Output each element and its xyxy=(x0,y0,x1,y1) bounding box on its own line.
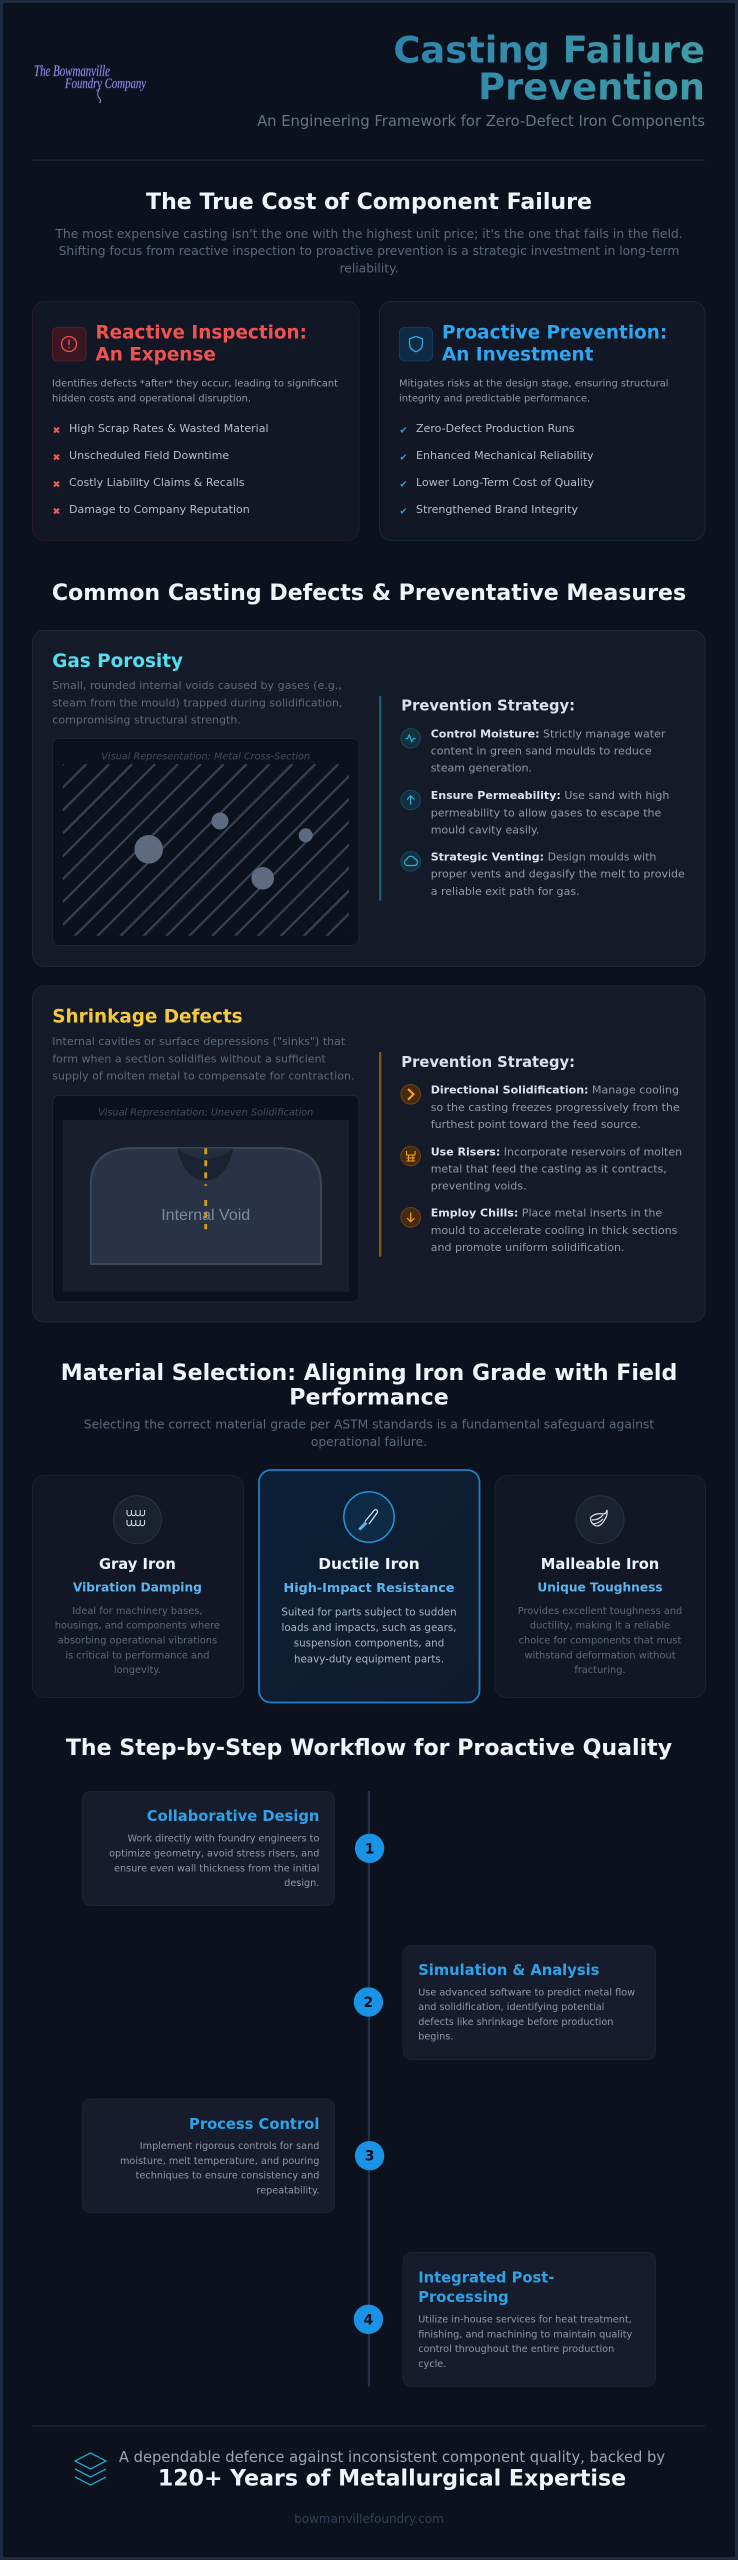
text: control moisture xyxy=(431,727,666,775)
list of benefits: Zero-Defect Production Runs xyxy=(416,422,575,435)
description: supply of molten metal to compensate for contraction. xyxy=(52,1070,355,1082)
subheading: operational failure. xyxy=(311,1435,427,1449)
title: Prevention xyxy=(478,65,705,108)
intro text: The most expensive casting isn't the one with the highest unit price; it's the one that fails in the field. xyxy=(54,227,683,241)
heading xyxy=(61,1361,677,1411)
panel: reactive inspection xyxy=(32,302,359,540)
hatch lines xyxy=(62,764,349,936)
prevention strategy xyxy=(379,696,685,901)
icon: risers xyxy=(401,1146,421,1166)
heading: workflow: The Step-by-Step Workflow for Proactive Quality xyxy=(66,1736,672,1761)
step 4 card: finishing, and machining to maintain quality xyxy=(418,2329,633,2340)
heading xyxy=(96,322,307,365)
list of benefits: Lower Long-Term Cost of Quality xyxy=(416,476,595,489)
intro text xyxy=(54,227,683,275)
description: is critical to performance and xyxy=(65,1650,209,1661)
x marks: ✖ xyxy=(52,452,60,464)
icon: alert xyxy=(52,328,86,361)
list of benefits: Strengthened Brand Integrity xyxy=(416,503,578,516)
text: employ chills: mould to accelerate cooling in thick sections xyxy=(431,1224,678,1237)
description: Internal cavities or surface depressions ("sinks") that xyxy=(52,1035,346,1048)
name: Ductile Iron xyxy=(318,1555,420,1573)
check marks: ✔ xyxy=(400,506,407,518)
step 3 card: Process Control xyxy=(189,2116,319,2133)
step 1 marker xyxy=(355,1834,384,1863)
step 4 card: cycle. xyxy=(418,2359,446,2370)
step 4 card: Integrated Post- xyxy=(418,2270,554,2287)
x marks: ✖ xyxy=(52,426,60,436)
text: directional solidification xyxy=(431,1084,680,1131)
sink depression xyxy=(177,1148,233,1181)
step 2 card: Simulation & Analysis xyxy=(418,1962,600,1979)
text: directional solidification: Directional Solidification: Manage cooling xyxy=(431,1084,679,1097)
text: ensure permeability: mould cavity easily. xyxy=(431,824,539,836)
name: Malleable Iron xyxy=(541,1556,659,1573)
panel: proactive prevention xyxy=(380,302,705,540)
step 4 card: Processing xyxy=(418,2289,509,2306)
x marks: ✖ xyxy=(52,506,60,518)
text: employ chills xyxy=(431,1207,678,1254)
metal cross-section visual xyxy=(52,738,360,946)
description xyxy=(399,378,668,404)
text: strategic venting: proper vents and degasify the melt to provide xyxy=(431,868,685,880)
text: control moisture: Control Moisture: Strictly manage water xyxy=(431,727,666,740)
subheading xyxy=(84,1418,654,1449)
icon: chills xyxy=(401,1208,421,1227)
check marks: ✔ xyxy=(400,480,407,490)
caption: Visual Representation: Uneven Solidification xyxy=(98,1108,313,1118)
description: Identifies defects *after* they occur, leading to significant xyxy=(52,378,338,390)
panel: gray iron xyxy=(32,1476,244,1698)
text: use risers: metal that feed the casting as it contracts, xyxy=(431,1162,667,1176)
check marks: ✔ xyxy=(400,452,407,464)
text: ensure permeability: Ensure Permeability: Use sand with high xyxy=(431,789,669,802)
uneven solidification visual xyxy=(52,1096,359,1302)
text: directional solidification: furthest point toward the feed source. xyxy=(431,1118,641,1131)
text: use risers xyxy=(431,1145,682,1193)
step 1 card xyxy=(82,1792,334,1906)
description: choice for components that must xyxy=(519,1636,682,1646)
step 3 card: Implement rigorous controls for sand xyxy=(140,2141,319,2152)
void label: Internal Void xyxy=(161,1207,250,1224)
section intro: true cost xyxy=(54,190,683,275)
icon: toughness xyxy=(576,1496,624,1544)
footer xyxy=(75,2449,665,2526)
property: High-Impact Resistance xyxy=(283,1581,455,1596)
tagline: A dependable defence against inconsistent component quality, backed by xyxy=(119,2449,665,2466)
text: strategic venting xyxy=(431,850,685,898)
panel: ductile iron xyxy=(259,1470,480,1702)
prevention strategy xyxy=(379,1052,682,1257)
check marks: ✔ xyxy=(400,426,407,436)
property: Unique Toughness xyxy=(537,1581,663,1595)
text: directional solidification: so the casting freezes progressively from the xyxy=(431,1101,680,1114)
description: Provides excellent toughness and xyxy=(518,1606,682,1617)
description xyxy=(518,1606,682,1676)
step 1 card: Work directly with foundry engineers to xyxy=(128,1834,319,1845)
description: ductility, making it a reliable xyxy=(530,1621,670,1632)
strategy heading: Prevention Strategy: xyxy=(401,1054,575,1071)
icon: layers xyxy=(75,2453,106,2485)
description: steam from the mould) trapped during solidification, xyxy=(52,696,342,709)
description: heavy-duty equipment parts. xyxy=(294,1653,444,1665)
heading: Reactive Inspection: xyxy=(96,322,307,343)
intro text: Shifting focus from reactive inspection to proactive prevention is a strategic investment in long-term xyxy=(59,244,679,258)
check marks xyxy=(400,426,407,518)
logo xyxy=(34,63,146,103)
step 2 marker xyxy=(354,1987,383,2017)
text: strategic venting: Strategic Venting: Design moulds with xyxy=(431,850,656,863)
icon: tool xyxy=(344,1492,394,1542)
voids xyxy=(134,812,313,890)
description: withstand deformation without xyxy=(524,1650,676,1661)
panel: shrinkage defects xyxy=(32,986,705,1322)
x marks: ✖ xyxy=(52,480,60,490)
step 3 card: repeatability. xyxy=(256,2185,319,2196)
logo: Foundry Company xyxy=(64,76,146,92)
step 1 marker: 1 xyxy=(365,1841,374,1857)
panel: malleable iron xyxy=(495,1476,706,1698)
step 4 card: Utilize in-house services for heat treatment, xyxy=(418,2315,632,2326)
step 1 card: Collaborative Design xyxy=(147,1808,319,1825)
icon: vibration xyxy=(113,1496,161,1544)
description: housings, and components where xyxy=(55,1621,220,1632)
step 3 card: moisture, melt temperature, and pouring xyxy=(120,2156,319,2167)
icon: shield xyxy=(400,328,432,361)
description xyxy=(52,1035,355,1082)
caption: Visual Representation: Metal Cross-Section xyxy=(101,751,310,762)
list of costs: High Scrap Rates & Wasted Material xyxy=(69,422,269,435)
text: use risers: preventing voids. xyxy=(431,1180,527,1193)
list of costs xyxy=(69,422,269,516)
list of costs: Unscheduled Field Downtime xyxy=(69,449,229,462)
heading: Shrinkage Defects xyxy=(52,1006,243,1028)
list of benefits xyxy=(416,422,595,516)
heading: Proactive Prevention: xyxy=(442,322,667,343)
heading: The True Cost of Component Failure xyxy=(146,190,592,215)
description: integrity and predictable performance. xyxy=(399,393,590,404)
icon: venting xyxy=(401,852,421,871)
description: loads and impacts, such as gears, xyxy=(282,1622,456,1634)
step 2 card: and solidification, identifying potential xyxy=(418,2002,604,2013)
text: strategic venting: a reliable exit path for gas. xyxy=(431,885,580,898)
description xyxy=(55,1606,220,1676)
subtitle: An Engineering Framework for Zero-Defect Iron Components xyxy=(257,113,705,130)
centre line xyxy=(204,1148,207,1229)
text: ensure permeability: permeability to allow gases to escape the xyxy=(431,806,662,819)
heading xyxy=(442,322,667,365)
section: material selection heading xyxy=(61,1361,677,1449)
text: control moisture: steam generation. xyxy=(431,762,532,775)
description: fracturing. xyxy=(574,1665,626,1676)
title: Casting Failure xyxy=(393,29,705,72)
description xyxy=(52,378,338,404)
description: compromising structural strength. xyxy=(52,714,241,726)
text: employ chills: Employ Chills: Place metal inserts in the xyxy=(431,1207,662,1220)
subheading: Selecting the correct material grade per ASTM standards is a fundamental safeguard against xyxy=(84,1418,654,1432)
description: hidden costs and operational disruption. xyxy=(52,393,251,404)
description: form when a section solidifies without a sufficient xyxy=(52,1052,327,1065)
heading: An Expense xyxy=(96,344,216,365)
step 4 card xyxy=(403,2252,656,2386)
description: Mitigates risks at the design stage, ensuring structural xyxy=(399,378,668,390)
step 3 marker xyxy=(355,2141,384,2170)
list of costs: Damage to Company Reputation xyxy=(69,503,250,516)
step 4 marker: 4 xyxy=(364,2312,374,2328)
logo: The Bowmanville xyxy=(34,63,110,80)
step 1 card: optimize geometry, avoid stress risers, and xyxy=(109,1848,319,1860)
description xyxy=(52,679,342,726)
title xyxy=(393,29,705,108)
timeline xyxy=(82,1791,656,2387)
step 1 card: ensure even wall thickness from the initial xyxy=(114,1863,319,1874)
step 2 card: begins. xyxy=(418,2032,453,2042)
expertise statement: 120+ Years of Metallurgical Expertise xyxy=(158,2466,626,2492)
heading: An Investment xyxy=(442,344,594,365)
x marks xyxy=(52,426,60,518)
heading: Gas Porosity xyxy=(52,651,183,672)
description: Suited for parts subject to sudden xyxy=(281,1606,457,1618)
icon: permeability xyxy=(401,790,421,810)
strategy heading: Prevention Strategy: xyxy=(401,698,575,715)
step 2 marker: 2 xyxy=(364,1995,373,2011)
step 3 card xyxy=(82,2099,334,2212)
step 3 marker: 3 xyxy=(365,2149,374,2165)
panel: gas porosity xyxy=(32,630,706,967)
list of costs: Costly Liability Claims & Recalls xyxy=(69,476,245,489)
step 1 card: design. xyxy=(284,1878,319,1889)
step 4 card: control throughout the entire production xyxy=(418,2344,614,2355)
description: suspension components, and xyxy=(294,1638,444,1650)
step 2 card xyxy=(403,1946,656,2060)
property: Vibration Damping xyxy=(73,1581,202,1595)
heading: defects: Common Casting Defects & Preventative Measures xyxy=(52,581,686,606)
step 3 card: techniques to ensure consistency and xyxy=(136,2171,319,2182)
description: absorbing operational vibrations xyxy=(58,1636,217,1646)
heading: Performance xyxy=(289,1386,449,1411)
description: Ideal for machinery bases, xyxy=(72,1606,202,1617)
header xyxy=(34,29,705,130)
description xyxy=(281,1606,457,1665)
text: control moisture: content in green sand moulds to reduce xyxy=(431,744,652,758)
description: Small, rounded internal voids caused by gases (e.g., xyxy=(52,679,342,692)
icon: directional xyxy=(401,1084,421,1104)
heading: Material Selection: Aligning Iron Grade with Field xyxy=(61,1361,677,1386)
list of benefits: Enhanced Mechanical Reliability xyxy=(416,449,594,462)
name: Gray Iron xyxy=(99,1556,176,1573)
casting shape xyxy=(91,1148,321,1264)
step 2 card: defects like shrinkage before production xyxy=(418,2017,613,2028)
icon: moisture xyxy=(401,728,421,748)
website: bowmanvillefoundry.com xyxy=(294,2512,444,2526)
text: ensure permeability xyxy=(431,789,669,836)
description: longevity. xyxy=(114,1665,161,1676)
step 4 marker xyxy=(354,2305,383,2334)
text: employ chills: and promote uniform solidification. xyxy=(431,1241,624,1254)
text: use risers: Use Risers: Incorporate reservoirs of molten xyxy=(431,1145,682,1158)
intro text: reliability. xyxy=(339,261,399,275)
step 2 card: Use advanced software to predict metal flow xyxy=(418,1987,635,1998)
